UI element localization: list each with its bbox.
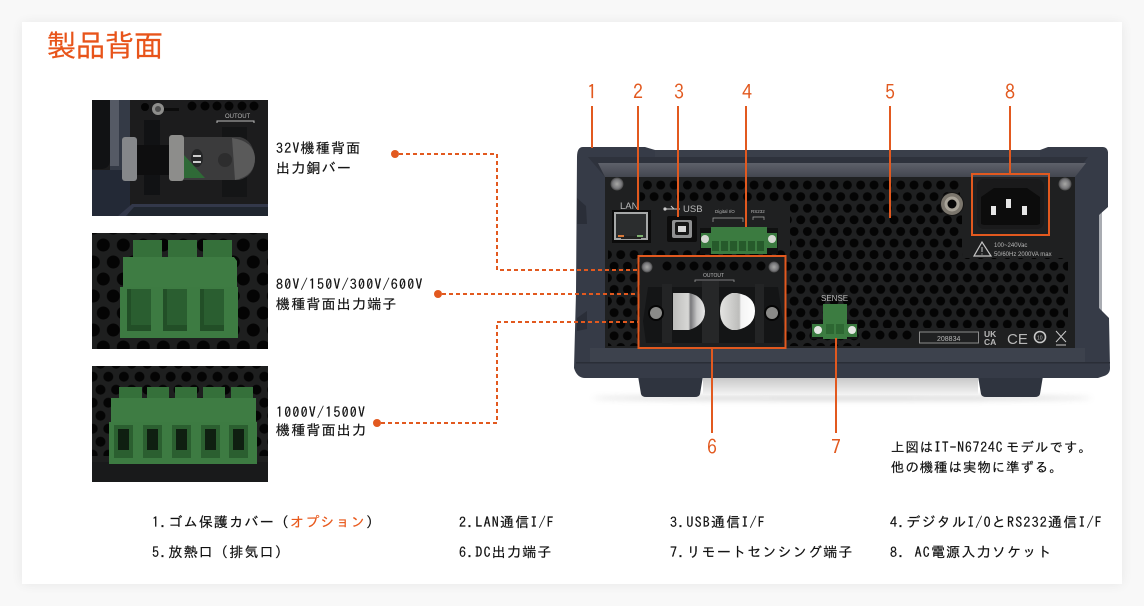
AC inlet — [977, 179, 1044, 229]
model note: 他の機種は実物に準ずる。 — [891, 460, 1064, 474]
callout numbers: 2 — [633, 82, 643, 102]
legend: 5.放熱口（排気口） — [152, 544, 290, 559]
LAN port — [612, 201, 651, 243]
legend: 1.ゴム保護カバー（オプション） — [152, 515, 381, 529]
LAN port: LAN — [620, 201, 639, 212]
caption: 1000V/1500V models: 1000V/1500V — [276, 404, 366, 419]
photo: 1000V/1500V output terminal — [92, 366, 268, 482]
photo: 80V/150V/300V/600V output terminal — [92, 233, 268, 349]
digital I/O and RS232 connector: RS232 — [751, 209, 765, 214]
caption: 1000V/1500V models: 機種背面出力 — [276, 423, 367, 437]
caption: 32V model: 32V機種背面 — [276, 141, 361, 155]
callout numbers: 3 — [674, 82, 684, 102]
dashed connector: 1000V/1500V — [373, 322, 638, 427]
digital I/O and RS232 connector — [700, 209, 778, 254]
serial number and certification marks: CA — [984, 337, 996, 347]
screws — [610, 178, 1072, 190]
legend: 7.リモートセンシング端子 — [670, 545, 854, 559]
callout numbers — [587, 82, 1015, 457]
callout boxes — [638, 174, 1049, 348]
digital I/O and RS232 connector: Digital I/O — [715, 209, 735, 214]
USB port — [663, 204, 703, 242]
chassis — [574, 147, 1110, 378]
caption: 80V-600V models: 80V/150V/300V/600V — [276, 276, 424, 291]
feet — [638, 376, 1043, 397]
serial number and certification marks: UK — [984, 329, 997, 339]
legend: 6.DC出力端子 — [459, 545, 553, 559]
serial number and certification marks — [920, 329, 1066, 348]
earth terminal — [940, 192, 964, 216]
USB port: USB — [683, 204, 703, 215]
serial number and certification marks: 10 — [1037, 336, 1043, 342]
dashed connector: 80V-600V — [434, 290, 638, 298]
AC rating label: 50/60Hz 2000VA max — [994, 252, 1052, 258]
callout leader lines — [592, 106, 1010, 433]
remote sense connector — [811, 294, 858, 339]
callout numbers: 1 — [587, 82, 597, 102]
AC rating label — [974, 242, 1052, 258]
photo: 32V output copper bar — [92, 100, 268, 216]
callout numbers: 4 — [742, 82, 752, 102]
legend: 3.USB通信I/F — [670, 514, 766, 529]
callout numbers: 8 — [1005, 82, 1015, 102]
legend: 4.デジタルI/OとRS232通信I/F — [890, 514, 1103, 529]
perforated back plate — [605, 177, 1075, 348]
caption: 80V-600V models: 機種背面出力端子 — [276, 297, 398, 311]
legend: 2.LAN通信I/F — [459, 514, 555, 529]
instrument rear panel — [574, 147, 1110, 400]
title: 製品背面 — [47, 23, 163, 65]
serial number and certification marks: 208834 — [937, 336, 960, 343]
DC output terminal: OUTOUT — [703, 273, 724, 279]
serial number and certification marks: CE — [1007, 331, 1028, 348]
callout numbers: 5 — [885, 82, 895, 102]
legend — [152, 514, 1103, 559]
callout numbers: 6 — [707, 437, 717, 457]
DC output terminal — [640, 257, 785, 347]
model note: モデルです。 — [1006, 440, 1093, 454]
legend: 8. AC電源入力ソケット — [890, 545, 1053, 559]
chassis side gap — [1094, 210, 1102, 314]
photo: 32V output copper bar: OUTOUT — [225, 114, 251, 120]
remote sense connector: SENSE — [821, 294, 848, 303]
dashed connector: 32V — [391, 150, 638, 270]
caption: 32V model: 出力銅バー — [276, 161, 352, 175]
model note: 上図はIT-N6724C — [891, 440, 1003, 454]
callout numbers: 7 — [831, 437, 841, 457]
AC rating label: 100~240Vac — [994, 243, 1027, 249]
